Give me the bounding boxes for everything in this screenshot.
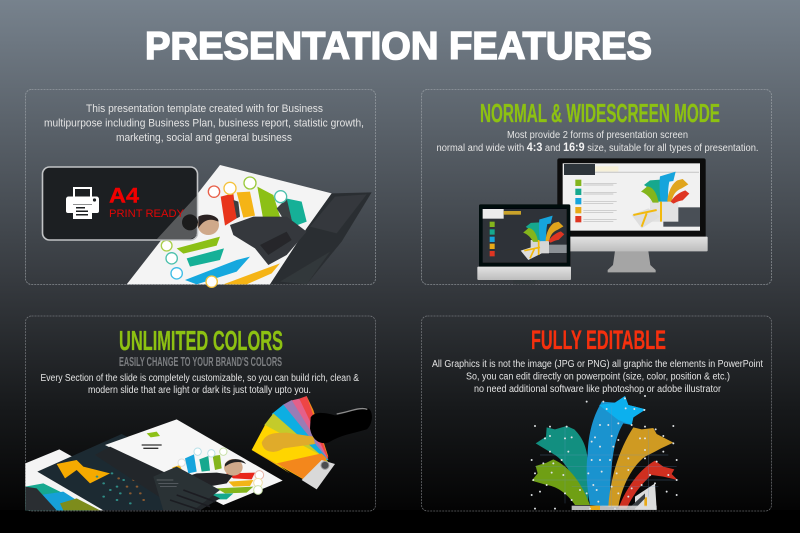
print ready label: PRINT READY — [109, 208, 185, 220]
description: modern slide that are light or dark its just totally upto you. — [88, 385, 311, 396]
heading: FULLY EDITABLE — [531, 325, 666, 355]
A4 label: A4 — [109, 184, 139, 208]
title: PRESENTATION FEATURES — [145, 25, 652, 68]
heading: UNLIMITED COLORS — [119, 325, 283, 356]
panel: fully editable — [422, 316, 772, 511]
intro text — [44, 103, 364, 144]
colour swatch fan and roller — [252, 396, 372, 489]
intro text: multipurpose including Business Plan, business report, statistic growth, — [44, 118, 364, 130]
panel: normal and widescreen — [422, 90, 772, 284]
panel: print ready — [26, 90, 376, 287]
description — [436, 130, 758, 154]
description: Every Section of the slide is completely customizable, so you can build rich, clean & — [40, 373, 359, 384]
description: Most provide 2 forms of presentation screen — [507, 130, 688, 141]
large monitor — [557, 158, 708, 272]
businessman — [182, 214, 307, 265]
description: no need additional software like photoshop or adobe illustrator — [474, 384, 722, 395]
description — [40, 373, 359, 396]
editable burst graphic — [532, 396, 678, 510]
intro text: marketing, social and general business — [116, 132, 292, 144]
small monitor — [477, 204, 571, 284]
slide pages — [25, 419, 283, 510]
panel: unlimited colors — [25, 316, 375, 511]
description: normal and wide with 4:3 and 16:9 size, suitable for all types of presentation. — [436, 142, 758, 154]
description — [432, 359, 763, 395]
description: So, you can edit directly on powerpoint (size, color, position & etc.) — [466, 372, 730, 382]
brochure illustration — [127, 165, 372, 287]
subheading: EASILY CHANGE TO YOUR BRAND'S COLORS — [119, 354, 282, 369]
intro text: This presentation template created with for Business — [86, 103, 323, 115]
monitors — [477, 158, 708, 284]
description: All Graphics it is not the image (JPG or PNG) all graphic the elements in PowerPoint — [432, 359, 763, 370]
icon: printer — [66, 187, 99, 219]
bottom black band — [0, 510, 800, 533]
A4 print ready badge — [42, 167, 198, 240]
